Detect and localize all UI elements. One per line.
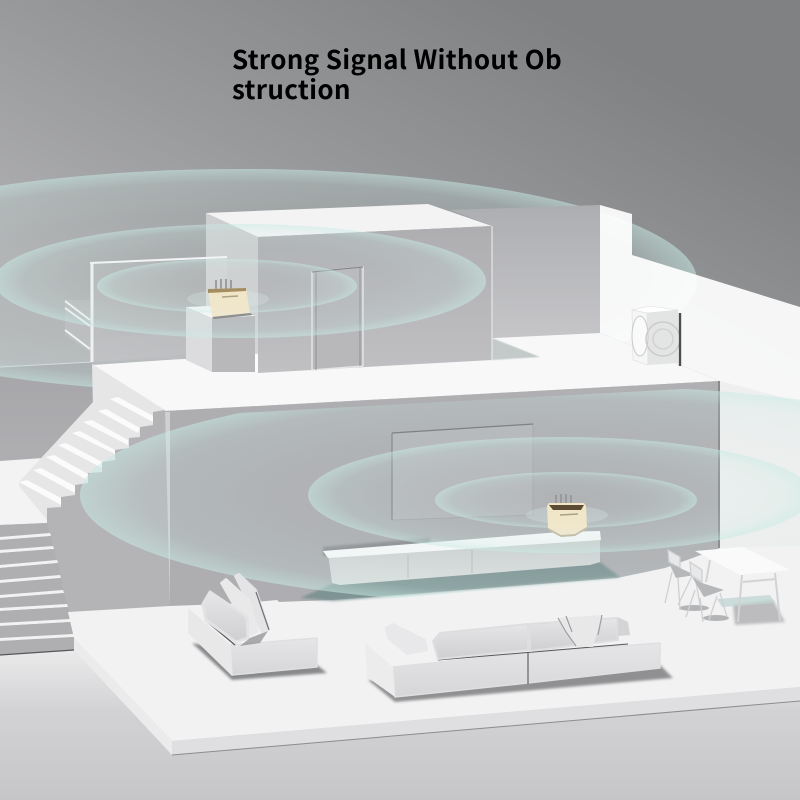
upper router [208, 279, 253, 319]
left lower wall [0, 362, 92, 465]
right white wall [600, 205, 800, 410]
lower right wall area [720, 381, 800, 550]
left sofa [189, 574, 327, 680]
pillow [221, 579, 258, 635]
router stand [186, 305, 255, 372]
staircase wall [47, 410, 170, 610]
upper signal wave: middle [0, 224, 486, 338]
bottom ground [0, 640, 800, 800]
room block [206, 204, 492, 373]
upper signal wave: core [187, 290, 269, 308]
TV cabinet [323, 531, 601, 585]
upper staircase [19, 364, 165, 520]
door [312, 267, 363, 370]
cabinet shadow [300, 562, 620, 601]
pillow [235, 574, 269, 632]
title: Strong Signal Without Obstruction [232, 40, 562, 107]
back cushion [203, 592, 248, 642]
upper floor slab [92, 333, 720, 418]
table [695, 547, 790, 622]
right arm pillow [618, 617, 630, 636]
left arm pillow [386, 624, 427, 654]
upper signal wave: inner [97, 259, 357, 313]
main sofa [365, 615, 673, 702]
left landing [0, 458, 47, 525]
lower floor [68, 545, 800, 755]
washing machine [632, 306, 680, 366]
TV panel [392, 424, 533, 520]
floor shadow and glass reflection [679, 595, 785, 625]
railing [65, 300, 90, 352]
antennas [216, 279, 231, 291]
antennas [556, 494, 571, 506]
chair front [686, 562, 727, 622]
back wall of upper floor [450, 205, 600, 340]
lower router [547, 494, 587, 537]
wall corner pillar and edges [165, 381, 719, 606]
upper signal wave: outer [0, 169, 697, 393]
lower signal wave: middle [308, 437, 800, 553]
throw blanket [558, 615, 602, 647]
right back cushion [530, 618, 618, 651]
lower signal wave: outer [80, 385, 800, 605]
lower signal wave: core [526, 506, 608, 524]
dining table and chairs [665, 547, 790, 625]
chair back [665, 550, 700, 610]
lower signal wave: inner [435, 472, 697, 528]
left back cushion [433, 624, 528, 659]
lower back wall [165, 381, 720, 606]
lower staircase [0, 523, 74, 655]
glass balcony wall [90, 257, 227, 362]
